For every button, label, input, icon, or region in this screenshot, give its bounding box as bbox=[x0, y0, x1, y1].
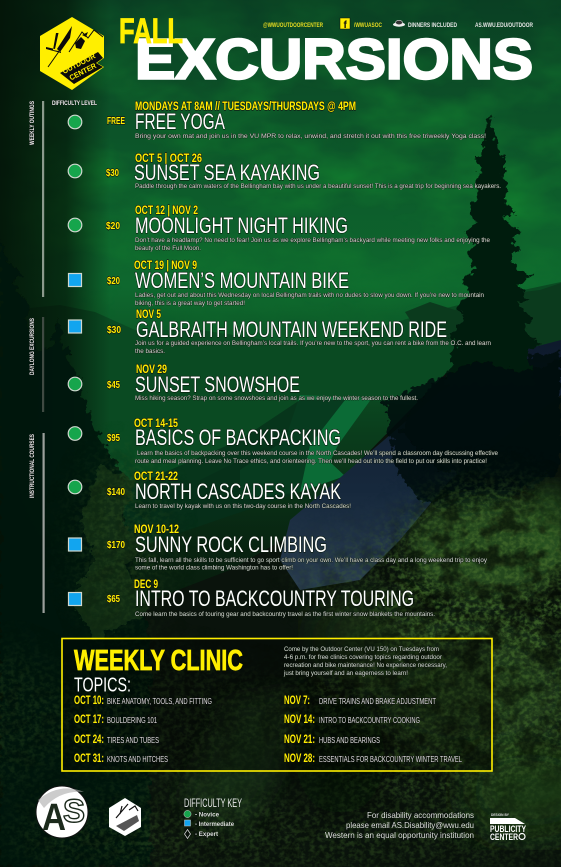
header links: DINNERS INCLUDED bbox=[408, 23, 458, 29]
excursion: Basics of Backpacking: route and meal planning. Leave No Trace ethics, and orienteering. Then we’ll head out into the field to put our skills into practice! bbox=[135, 458, 487, 465]
excursion: North Cascades Kayak: Learn to travel by kayak with us on this two-day course in the North Cascades! bbox=[135, 503, 351, 510]
excursion: Sunset Snowshoe: Miss hiking season? Strap on some snowshoes and join as as we enjoy the winter season to the fullest. bbox=[135, 395, 418, 402]
october topics: BIKE ANATOMY, TOOLS, AND FITTING bbox=[107, 696, 212, 706]
excursion: Intro to Backcountry Touring: Come learn the basics of touring gear and backcountry travel as the first winter snow blankets the mountains. bbox=[135, 611, 435, 618]
disability notice: Western is an equal opportunity institution bbox=[325, 830, 474, 840]
clinic heading: WEEKLY CLINIC bbox=[74, 645, 243, 677]
logo: publicity center: PUBLICITY bbox=[490, 824, 526, 835]
logo: publicity center bbox=[490, 812, 526, 843]
tall conifer silhouette bbox=[444, 114, 540, 385]
excursion: Women's Mountain Bike: biking, this is a great way to get started! bbox=[135, 300, 245, 307]
difficulty level label: DIFFICULTY LEVEL bbox=[52, 101, 97, 107]
logo: associated students bbox=[36, 786, 88, 839]
excursion: Free Yoga bbox=[68, 99, 486, 140]
excursion: Sunset Snowshoe: NOV 29 bbox=[136, 362, 167, 376]
october topics: TIRES AND TUBES bbox=[107, 735, 159, 745]
excursion: Sunset Snowshoe: SUNSET SNOWSHOE bbox=[135, 372, 300, 397]
excursion: Sunset Sea Kayaking: OCT 5 | OCT 26 bbox=[135, 151, 202, 165]
lower foliage tones bbox=[410, 500, 561, 600]
excursion: Intro to Backcountry Touring: $65 bbox=[107, 593, 120, 605]
difficulty key: - Intermediate bbox=[195, 822, 235, 828]
november topics bbox=[284, 695, 462, 765]
title: Excursions: EXCURSIONS bbox=[135, 28, 533, 92]
header links: /WWUASOC bbox=[354, 23, 383, 29]
excursion: North Cascades Kayak bbox=[68, 469, 351, 510]
excursion: Women's Mountain Bike: $20 bbox=[107, 275, 120, 287]
october topics: OCT 24: bbox=[74, 734, 104, 746]
excursion: North Cascades Kayak: OCT 21-22 bbox=[134, 469, 178, 483]
excursion: Free Yoga: FREE YOGA bbox=[135, 109, 225, 134]
excursion: Women's Mountain Bike bbox=[68, 258, 485, 307]
excursion: Basics of Backpacking: Learn the basics of backpacking over this weekend course in the North Cascades! We’ll spend a classroom day discussing effective bbox=[137, 450, 499, 457]
clinic description: just bring yourself and an eagerness to learn! bbox=[283, 670, 408, 677]
excursion: Sunny Rock Climbing: This fall, learn all the skills to be sufficient to go sport climb on your own. We’ll have a class day and a long weekend trip to enjoy bbox=[135, 557, 488, 564]
outdoor center logo bbox=[40, 17, 104, 90]
excursion: Sunset Sea Kayaking: SUNSET SEA KAYAKING bbox=[134, 160, 320, 185]
excursion: Galbraith Mountain Weekend Ride: the basics. bbox=[135, 348, 165, 355]
excursion: Intro to Backcountry Touring bbox=[68, 577, 435, 618]
november topics: NOV 14: bbox=[284, 714, 315, 726]
excursion: Sunset Snowshoe bbox=[68, 362, 418, 402]
excursion: Moonlight Night Hiking: OCT 12 | NOV 2 bbox=[135, 203, 198, 217]
excursion: Galbraith Mountain Weekend Ride: Join us for a guided experience on Bellingham’s local trails. If you’re new to the sport, you can rent a bike from the O.C. and learn bbox=[135, 340, 492, 347]
logo: associated students: S bbox=[63, 793, 85, 829]
excursion: Sunny Rock Climbing: $170 bbox=[107, 539, 125, 551]
panel: weekly clinic bbox=[62, 638, 492, 771]
excursion: Sunny Rock Climbing: SUNNY ROCK CLIMBING bbox=[135, 532, 327, 557]
november topics: HUBS AND BEARINGS bbox=[319, 735, 380, 745]
clinic description: Come by the Outdoor Center (VU 150) on Tuesdays from bbox=[284, 646, 439, 653]
october topics: OCT 10: bbox=[74, 695, 104, 707]
excursion: Moonlight Night Hiking: beauty of the Full Moon. bbox=[135, 245, 201, 252]
disability notice: For disability accommodations bbox=[367, 810, 474, 820]
difficulty key: - Expert bbox=[195, 832, 218, 838]
october topics: OCT 31: bbox=[74, 753, 104, 765]
excursion: Sunny Rock Climbing: some of the world class climbing Washington has to offer! bbox=[135, 564, 293, 572]
excursion: Moonlight Night Hiking: MOONLIGHT NIGHT HIKING bbox=[135, 213, 348, 238]
excursion: Women's Mountain Bike: WOMEN’S MOUNTAIN BIKE bbox=[135, 268, 349, 293]
excursion: Sunny Rock Climbing bbox=[68, 522, 488, 572]
excursion: Galbraith Mountain Weekend Ride: NOV 5 bbox=[136, 307, 161, 321]
section rail: daylong excursions bbox=[30, 317, 44, 412]
excursion: Sunset Sea Kayaking: Paddle through the calm waters of the Bellingham bay with us under a beautiful sunset! This is a great trip for beginning sea kayakers. bbox=[135, 183, 501, 190]
excursion: Moonlight Night Hiking: $20 bbox=[106, 220, 120, 232]
topics heading: TOPICS: bbox=[74, 674, 131, 696]
excursion: Moonlight Night Hiking: Don’t have a headlamp? No need to fear! Join us as we explore Bellingham’s backyard while meeting new folks and enjoying the bbox=[135, 237, 491, 244]
header links: AS.WWU.EDU/OUTDOOR bbox=[475, 23, 534, 29]
section rail: instructional courses: INSTRUCTIONAL COURSES bbox=[30, 434, 36, 498]
excursion: Sunset Sea Kayaking bbox=[68, 151, 501, 190]
excursion: Free Yoga: FREE bbox=[107, 115, 125, 127]
excursion: Sunny Rock Climbing: NOV 10-12 bbox=[134, 522, 179, 536]
november topics: NOV 7: bbox=[284, 695, 310, 707]
november topics: NOV 21: bbox=[284, 734, 315, 746]
excursion: North Cascades Kayak: NORTH CASCADES KAYAK bbox=[135, 479, 341, 504]
excursion: Galbraith Mountain Weekend Ride: $30 bbox=[107, 324, 121, 336]
excursion: Basics of Backpacking bbox=[68, 416, 499, 465]
october topics: KNOTS AND HITCHES bbox=[107, 754, 168, 764]
excursion: Basics of Backpacking: $95 bbox=[107, 432, 120, 444]
november topics: NOV 28: bbox=[284, 753, 315, 765]
header links bbox=[263, 18, 534, 31]
clinic description: recreation and bike maintenance! No experience necessary, bbox=[284, 662, 447, 669]
excursion: Sunset Sea Kayaking: $30 bbox=[106, 167, 119, 179]
excursion: Moonlight Night Hiking bbox=[68, 203, 491, 252]
excursion: Women's Mountain Bike: OCT 19 | NOV 9 bbox=[134, 258, 197, 272]
november topics: DRIVE TRAINS AND BRAKE ADJUSTMENT bbox=[319, 696, 436, 706]
difficulty key: DIFFICULTY KEY bbox=[184, 798, 242, 810]
disability notice: please email AS.Disability@wwu.edu bbox=[346, 820, 474, 830]
excursion: Free Yoga: MONDAYS AT 8AM // TUESDAYS/THURSDAYS @ 4PM bbox=[135, 99, 356, 113]
header links: @WWUOUTDOORCENTER bbox=[263, 23, 324, 29]
excursion: Basics of Backpacking: OCT 14-15 bbox=[134, 416, 178, 430]
header links: f bbox=[344, 20, 348, 31]
excursion: Basics of Backpacking: BASICS OF BACKPACKING bbox=[135, 425, 341, 450]
november topics: INTRO TO BACKCOUNTRY COOKING bbox=[319, 715, 420, 725]
excursion: Sunset Snowshoe: $45 bbox=[107, 379, 120, 391]
clinic description bbox=[283, 646, 447, 677]
difficulty key bbox=[184, 798, 242, 838]
excursion: Galbraith Mountain Weekend Ride bbox=[68, 307, 492, 355]
outdoor center logo: OUTDOOR bbox=[61, 51, 97, 76]
excursion: Intro to Backcountry Touring: INTRO TO BACKCOUNTRY TOURING bbox=[135, 586, 414, 611]
clinic description: 4-6 p.m. for free clinics covering topics regarding outdoor bbox=[284, 654, 442, 661]
excursion: Women's Mountain Bike: Ladies, get out and about this Wednesday on local Bellingham trails with no dudes to slow you down. If you’re new to mountain bbox=[135, 292, 485, 299]
title: Fall: FALL bbox=[119, 12, 183, 51]
logo: publicity center: CENTER bbox=[490, 832, 518, 843]
logo: associated students: A bbox=[42, 797, 66, 839]
section rail: daylong excursions: DAYLONG EXCURSIONS bbox=[30, 318, 36, 375]
october topics: OCT 17: bbox=[74, 714, 104, 726]
outdoor center logo: CENTER bbox=[68, 61, 98, 82]
section rail: weekly outings: WEEKLY OUTINGS bbox=[30, 101, 36, 145]
excursion: Intro to Backcountry Touring: DEC 9 bbox=[134, 577, 158, 591]
difficulty key: - Novice bbox=[195, 812, 220, 818]
excursion: Galbraith Mountain Weekend Ride: GALBRAITH MOUNTAIN WEEKEND RIDE bbox=[136, 317, 447, 342]
excursion: North Cascades Kayak: $140 bbox=[107, 486, 125, 498]
logo: publicity center: DESIGN BY bbox=[491, 812, 509, 817]
excursion: Free Yoga: Bring your own mat and join us in the VU MPR to relax, unwind, and stretch it out with this free triweekly Yoga class! bbox=[135, 133, 486, 140]
logo: outdoor center white bbox=[109, 798, 141, 836]
november topics: ESSENTIALS FOR BACKCOUNTRY WINTER TRAVEL bbox=[319, 754, 462, 764]
disability notice bbox=[325, 810, 474, 840]
october topics bbox=[74, 695, 212, 765]
october topics: BOULDERING 101 bbox=[107, 715, 157, 725]
